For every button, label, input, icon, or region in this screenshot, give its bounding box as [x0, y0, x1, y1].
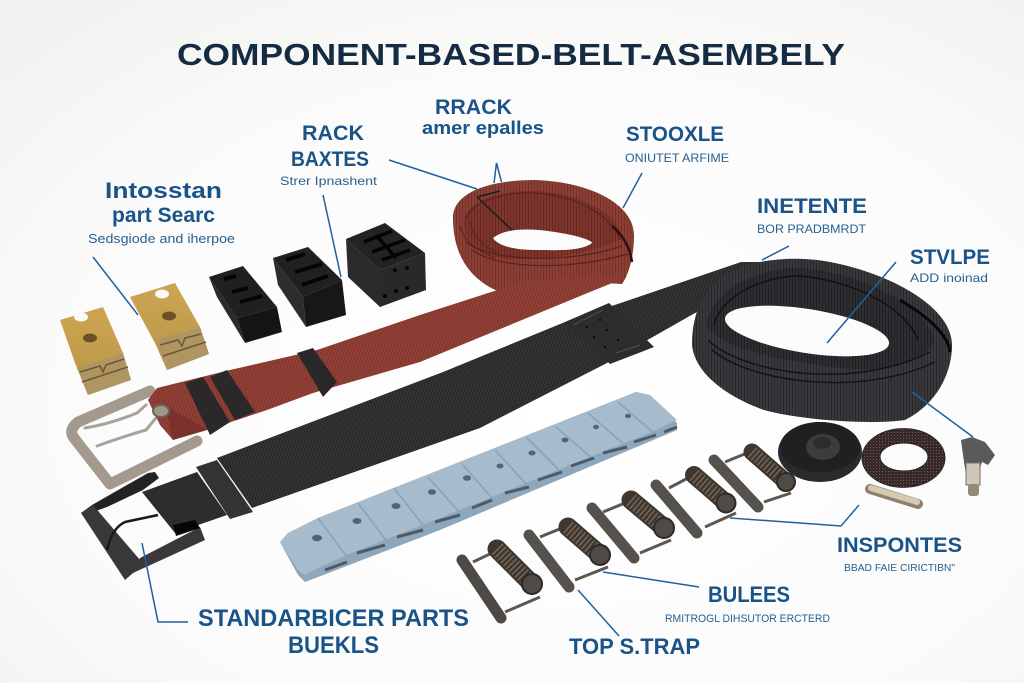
label: RACK BAXTES: RACK	[302, 122, 364, 145]
label: STANDARBICER PARTS BUEKLS	[198, 605, 469, 659]
spring clip E	[714, 452, 795, 507]
label: BULEES: RMITROGL DIHSUTOR ERCTERD	[665, 613, 830, 625]
label: INSPONTES: INSPONTES	[837, 534, 962, 557]
label: INETENTE: BOR PRADBMRDT	[757, 222, 867, 236]
label: STANDARBICER PARTS BUEKLS: STANDARBICER PARTS	[198, 605, 469, 632]
blue segmented keeper	[280, 392, 677, 582]
spring clip C	[592, 500, 674, 558]
label: RACK BAXTES: BAXTES	[291, 148, 369, 171]
silver buckle	[72, 391, 197, 484]
black blocks	[209, 223, 426, 343]
label: Intosstan part Searc: Sedsgiode and iherpoe	[88, 231, 235, 246]
spring clips	[462, 452, 795, 618]
label: STOOXLE: ONIUTET ARFIME	[625, 153, 729, 165]
label: STOOXLE	[625, 123, 729, 165]
label: BULEES: BULEES	[708, 582, 790, 607]
label: INSPONTES	[837, 534, 962, 574]
small metal fitting	[961, 437, 995, 496]
label: STVLPE: STVLPE	[910, 246, 990, 269]
label: Intosstan part Searc: part Searc	[112, 204, 215, 227]
black belt coil	[692, 259, 952, 422]
label: BULEES	[665, 582, 830, 625]
label: STOOXLE: STOOXLE	[626, 123, 724, 146]
label: STVLPE: ADD inoinad	[910, 271, 988, 285]
leader lines	[93, 160, 973, 636]
label: INSPONTES: BBAD FAIE CIRICTIBN"	[844, 562, 955, 574]
label: RACK BAXTES	[280, 122, 378, 188]
red belt strap	[148, 277, 627, 440]
label: INETENTE: INETENTE	[757, 195, 867, 218]
label: Intosstan part Searc: Intosstan	[105, 178, 222, 203]
metal pill	[870, 488, 918, 504]
red belt coil	[453, 180, 634, 292]
spring clip A	[462, 549, 542, 618]
spring clip D	[656, 475, 736, 533]
gold plates	[60, 283, 209, 395]
label: STVLPE	[910, 246, 990, 285]
label: RRACK amer epalles: RRACK	[435, 96, 512, 119]
title: COMPONENT-BASED-BELT-ASEMBELY	[177, 37, 845, 72]
spring clip B	[529, 527, 610, 587]
label: RRACK amer epalles: amer epalles	[422, 118, 544, 138]
black buckle	[81, 460, 253, 580]
belt keepers on red strap	[185, 348, 337, 435]
label: RRACK amer epalles	[422, 96, 544, 138]
label: Intosstan part Searc	[88, 178, 235, 246]
black belt strap	[217, 262, 790, 508]
label: INETENTE	[757, 195, 867, 236]
textured ring	[862, 429, 945, 487]
label: RACK BAXTES: Strer Ipnashent	[280, 174, 378, 188]
square belt slider	[565, 303, 654, 364]
label: TOP S.TRAP: TOP S.TRAP	[569, 634, 700, 659]
black disc	[778, 422, 862, 482]
label: STANDARBICER PARTS BUEKLS: BUEKLS	[288, 632, 379, 659]
